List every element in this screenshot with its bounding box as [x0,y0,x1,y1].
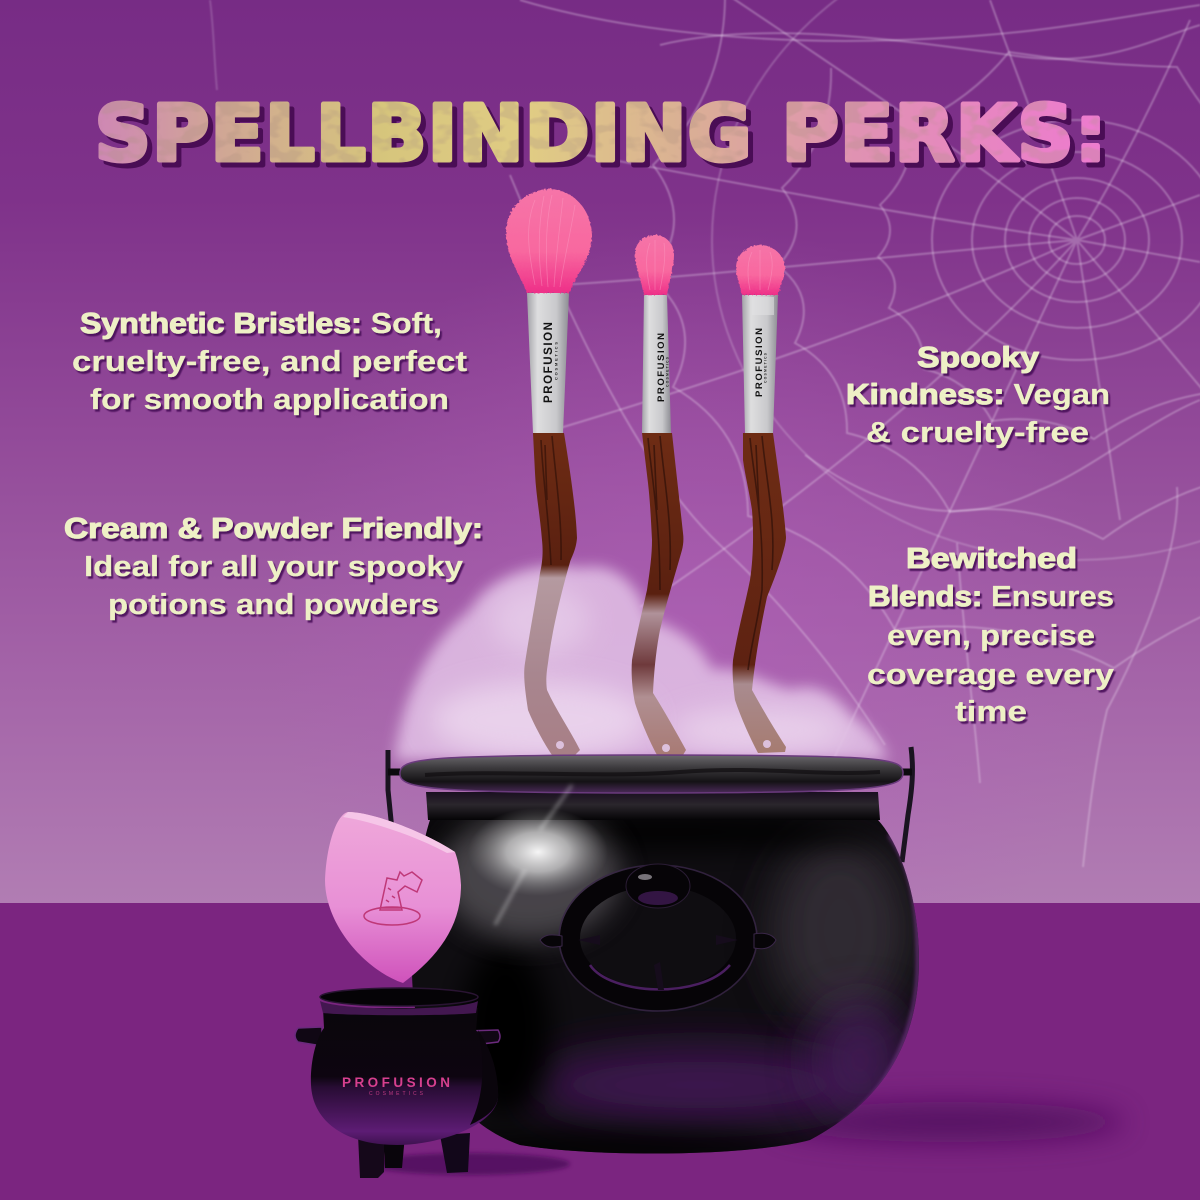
text: synthetic bristles: cruelty-free, and perfect [72,346,467,378]
bristles [635,235,674,295]
floor [0,903,1200,1200]
text: cream and powder friendly: potions and powders [108,589,439,621]
logo: PROFUSION [656,333,667,402]
text: bewitched blends: Blends: Ensures [868,581,1114,613]
brush 3: COSMETICS [764,352,768,383]
body shading [410,810,918,1162]
emblem [540,864,776,1011]
text: cream and powder friendly: Ideal for all your spooky [84,551,463,583]
text: synthetic bristles [72,308,467,416]
ferrule [527,293,569,433]
text: bewitched blends: Bewitched [906,543,1077,575]
rim [400,755,903,793]
title: SPELLBINDING PERKS: [100,95,1111,184]
handles [295,1027,500,1046]
text: bewitched blends: coverage every [867,659,1114,691]
handle [733,433,786,753]
text: bewitched blends: time [955,696,1027,728]
text: bewitched blends [867,543,1114,728]
large cauldron [388,747,919,1162]
highlight [468,808,608,896]
background wall [0,0,1200,903]
rim [320,988,478,1006]
beauty sponge [325,812,461,983]
ferrule [642,295,671,433]
brush 2 [632,235,686,755]
brush 3 [733,245,786,753]
brush 2: COSMETICS [666,356,670,387]
text: cream and powder friendly: Cream & Powder Friendly: [64,513,483,545]
shadow [370,1153,570,1175]
logo: PROFUSION [754,328,765,397]
brush 1 [506,189,592,755]
smoke cloud [395,566,888,760]
text: bewitched blends: even, precise [887,620,1095,652]
text: spooky kindness [846,342,1110,449]
title: SPELLBINDING PERKS: [95,90,1106,179]
logo: PROFUSION [342,1075,450,1090]
text: spooky kindness: & cruelty-free [866,417,1089,449]
text: spooky kindness: Spooky [917,342,1039,374]
text: spooky kindness: Kindness: Vegan [846,379,1110,411]
small cauldron [295,988,570,1178]
small cauldron: COSMETICS [369,1091,424,1097]
bristles [506,189,592,293]
brush 1: COSMETICS [554,342,558,380]
neck [426,792,880,820]
handle [524,433,580,755]
handle [632,433,686,755]
legs [383,1135,405,1168]
text: synthetic bristles: for smooth application [90,384,449,416]
floor shadow [775,1102,1125,1142]
logo: PROFUSION [543,322,555,403]
body [311,1008,498,1145]
ferrule [742,295,778,433]
text: cream and powder friendly [64,513,483,621]
text: synthetic bristles: Synthetic Bristles: Soft, [80,308,442,340]
bristles [736,245,785,295]
spider web [210,0,1200,867]
cauldron body [412,820,919,1154]
icon: witch hat [364,872,422,925]
wire handle [388,747,912,862]
